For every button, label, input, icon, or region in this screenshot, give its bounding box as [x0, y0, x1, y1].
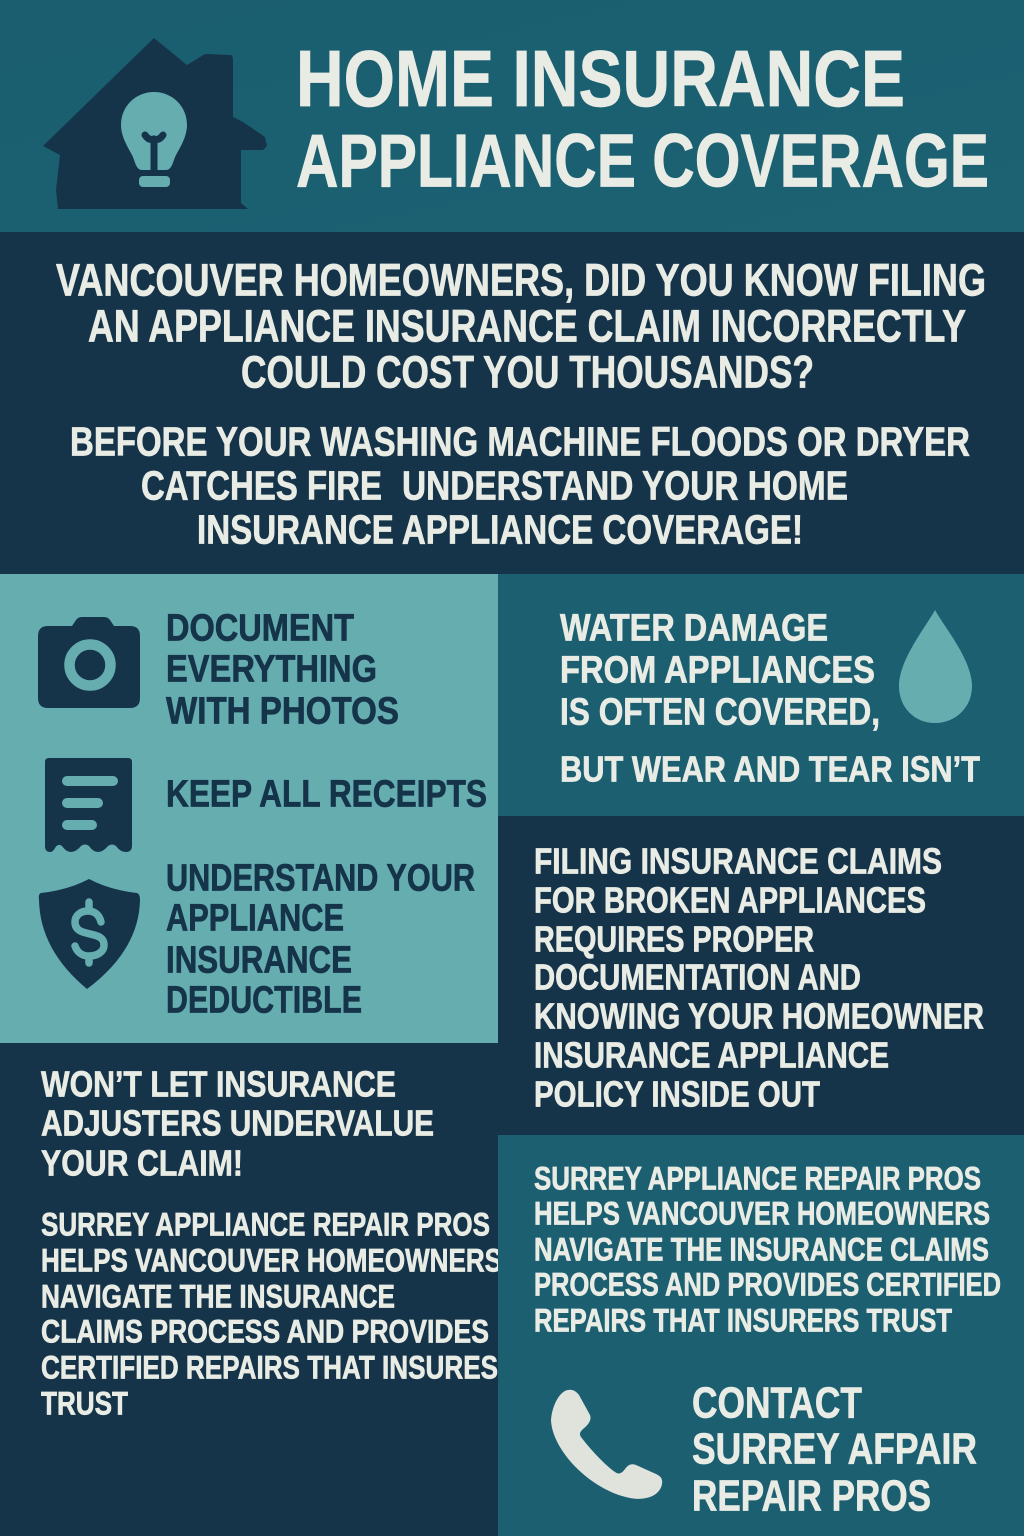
text block: intro warning: UNDERSTAND YOUR HOME: [402, 462, 848, 508]
text: understand deductible: DEDUCTIBLE: [166, 980, 362, 1022]
text: surrey appliance right: [534, 1160, 1001, 1338]
text: contact: CONTACT: [692, 1378, 862, 1428]
text: filing claims: INSURANCE APPLIANCE: [534, 1034, 889, 1076]
text: document everything: EVERYTHING: [166, 648, 377, 690]
text: filing claims: [534, 840, 984, 1114]
text: document everything: DOCUMENT: [166, 608, 354, 650]
text: filing claims: FOR BROKEN APPLIANCES: [534, 880, 926, 920]
panel: adjusters: [0, 1043, 502, 1536]
icon: phone: [551, 1390, 662, 1499]
text: surrey appliance left: CLAIMS PROCESS AND PROVIDES: [41, 1314, 489, 1350]
panel: water damage: [498, 574, 1024, 816]
icon: receipt: [45, 758, 132, 852]
text: understand deductible: [166, 858, 475, 1022]
text block: intro warning: [70, 418, 970, 552]
text: water damage coverage: [560, 608, 980, 790]
title: HOME INSURANCE: [296, 34, 905, 123]
text: document everything: WITH PHOTOS: [166, 690, 399, 732]
text: contact: [692, 1378, 977, 1520]
panel: contact: [498, 1135, 1024, 1536]
text: surrey appliance left: CERTIFIED REPAIRS THAT INSURES: [41, 1350, 498, 1386]
panel: intro: [0, 232, 1024, 574]
text: surrey appliance left: NAVIGATE THE INSURANCE: [41, 1278, 395, 1314]
text: filing claims: POLICY INSIDE OUT: [534, 1074, 820, 1114]
icon: shield with dollar: [39, 879, 140, 989]
text: keep receipts: KEEP ALL RECEIPTS: [166, 774, 487, 816]
text: water damage coverage: WATER DAMAGE: [560, 608, 828, 650]
heading: adjusters: YOUR CLAIM!: [41, 1142, 243, 1184]
title: [296, 34, 989, 202]
icon: water drop: [899, 610, 972, 723]
heading: adjusters: [41, 1064, 434, 1184]
panel: filing claims: [498, 816, 1024, 1135]
text: contact: REPAIR PROS: [692, 1472, 931, 1520]
heading: adjusters: ADJUSTERS UNDERVALUE: [41, 1102, 434, 1144]
text: water damage coverage: FROM APPLIANCES: [560, 650, 875, 692]
text: filing claims: REQUIRES PROPER: [534, 918, 814, 960]
text: understand deductible: APPLIANCE: [166, 898, 344, 940]
text block: intro question: COULD COST YOU THOUSANDS?: [241, 346, 814, 398]
text: surrey appliance left: HELPS VANCOUVER HOMEOWNERS: [41, 1242, 502, 1278]
text: understand deductible: INSURANCE: [166, 940, 352, 982]
text: surrey appliance left: TRUST: [41, 1386, 128, 1422]
text: document everything: [166, 608, 399, 732]
text: surrey appliance left: [41, 1206, 502, 1422]
text: water damage coverage: IS OFTEN COVERED,: [560, 692, 880, 734]
icon: house with light bulb: [43, 38, 267, 209]
panel: header: [0, 0, 1024, 232]
text: filing claims: DOCUMENTATION AND: [534, 956, 861, 998]
text block: intro warning: CATCHES FIRE: [141, 462, 382, 508]
text: filing claims: FILING INSURANCE CLAIMS: [534, 840, 942, 882]
text: surrey appliance left: SURREY APPLIANCE REPAIR PROS: [41, 1206, 490, 1242]
text block: intro warning: INSURANCE APPLIANCE COVERAGE!: [197, 506, 803, 552]
text: understand deductible: UNDERSTAND YOUR: [166, 858, 475, 900]
panel: checklist: [0, 574, 498, 1043]
icon: camera: [38, 617, 140, 708]
text block: intro question: [56, 254, 986, 398]
heading: adjusters: WON’T LET INSURANCE: [41, 1064, 396, 1104]
